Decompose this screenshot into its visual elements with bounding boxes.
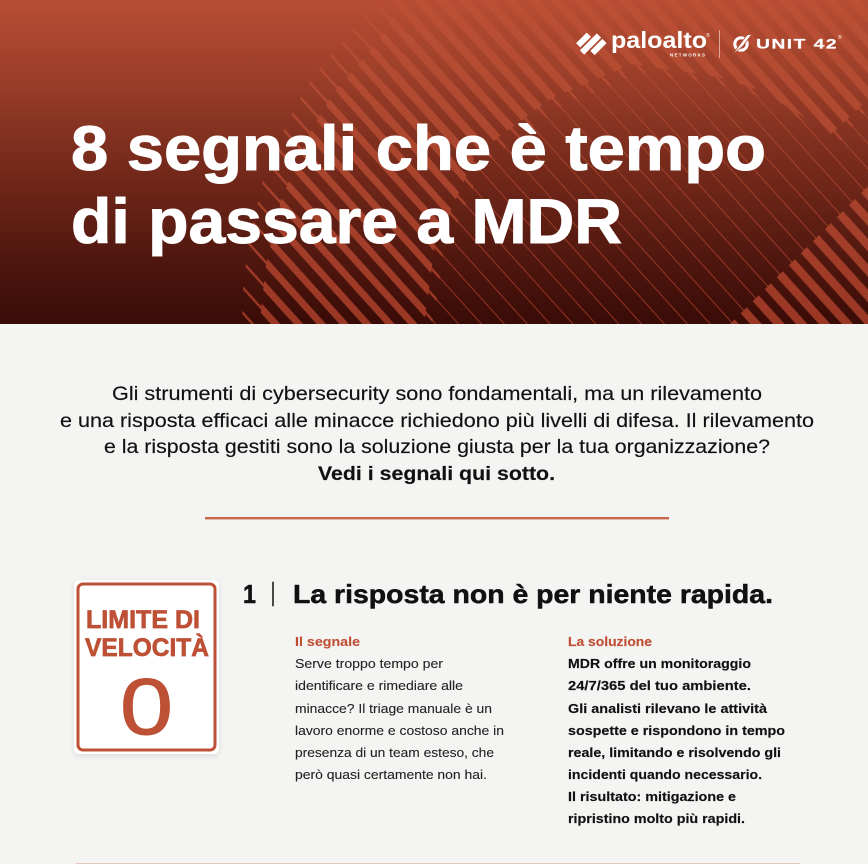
paloalto wordmark: paloalto (611, 27, 707, 53)
column: la soluzione: Il risultato: mitigazione e (568, 789, 736, 804)
column: la soluzione: incidenti quando necessario. (568, 767, 762, 782)
intro text (60, 383, 814, 485)
column: il segnale: presenza di un team esteso, che (295, 745, 494, 760)
column: la soluzione: 24/7/365 del tuo ambiente. (568, 678, 751, 693)
speed limit sign icon (74, 580, 219, 754)
column: il segnale: però quasi certamente non hai. (295, 767, 487, 782)
column: la soluzione: reale, limitando e risolvendo gli (568, 745, 781, 760)
bottom divider (76, 863, 800, 864)
column: la soluzione: Gli analisti rilevano le attività (568, 701, 768, 716)
column: il segnale: Il segnale (295, 634, 360, 649)
column: la soluzione: MDR offre un monitoraggio (568, 656, 751, 671)
title (71, 114, 766, 257)
intro text: e una risposta efficaci alle minacce richiedono più livelli di difesa. Il rilevamento (60, 410, 814, 432)
intro text: e la risposta gestiti sono la soluzione giusta per la tua organizzazione? (104, 436, 770, 458)
hero banner (0, 0, 868, 324)
column: il segnale: Serve troppo tempo per (295, 656, 444, 671)
section heading: La risposta non è per niente rapida. (293, 579, 773, 609)
logo: Unit 42 (732, 34, 842, 55)
title: 8 segnali che è tempo (71, 114, 766, 184)
divider (205, 517, 669, 519)
speed limit sign icon: VELOCITÀ (85, 633, 209, 662)
column: la soluzione: ripristino molto più rapidi. (568, 811, 745, 826)
registered mark: ® (838, 34, 842, 41)
column: il segnale: lavoro enorme e costoso anche in (295, 723, 504, 738)
intro text: Vedi i segnali qui sotto. (318, 463, 555, 485)
column: la soluzione: La soluzione (568, 634, 652, 649)
column: la soluzione: sospette e rispondono in tempo (568, 723, 785, 738)
Unit 42 wordmark: UNIT 42 (756, 36, 838, 51)
speed limit sign icon: LIMITE DI (86, 606, 200, 634)
intro text: Gli strumenti di cybersecurity sono fondamentali, ma un rilevamento (112, 383, 762, 405)
column: la soluzione (568, 634, 785, 826)
logo divider (719, 30, 720, 58)
column: il segnale: minacce? Il triage manuale è un (295, 701, 492, 716)
registered mark: ® (706, 32, 710, 39)
column: il segnale (295, 634, 504, 782)
title: di passare a MDR (71, 187, 622, 257)
column: il segnale: identificare e rimediare alle (295, 678, 463, 693)
networks wordmark: NETWORKS (670, 52, 705, 58)
section heading: 1 (243, 579, 256, 609)
icon: Palo Alto bars (576, 33, 607, 55)
logo: Palo Alto Networks (576, 27, 710, 58)
speed limit sign icon: 0 (120, 662, 173, 751)
icon: Unit 42 mark (732, 34, 752, 55)
